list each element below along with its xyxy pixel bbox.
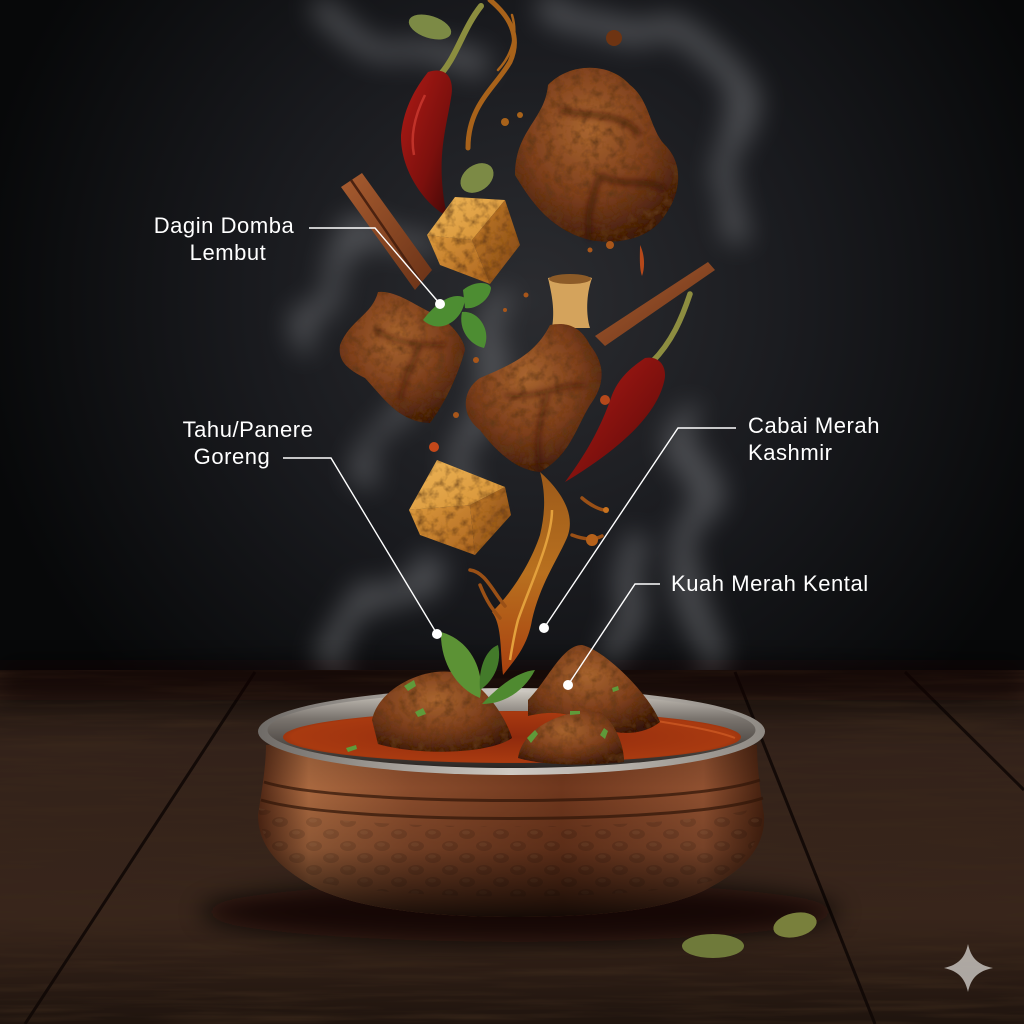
left lamb piece [340, 292, 465, 423]
cinnamon stick right [595, 262, 715, 346]
label: Cabai Merah Kashmir: Kashmir [748, 440, 833, 465]
right chili [565, 294, 690, 482]
bowl meat pieces [346, 645, 660, 765]
top sauce drizzle [468, 0, 622, 148]
label: Tahu/Panere Goreng: Goreng [194, 444, 270, 469]
label: Dagin Domba Lembut: Lembut [190, 240, 266, 265]
cardamom pods [406, 10, 819, 958]
bowl shadow [200, 882, 840, 942]
label: Tahu/Panere Goreng: Tahu/Panere [183, 417, 313, 442]
mint in bowl [441, 632, 535, 704]
mint sprig top [423, 283, 491, 348]
steam [306, 5, 740, 680]
lamb shank with bone [466, 274, 602, 472]
dark background [0, 0, 1024, 680]
paneer cube top [427, 197, 520, 284]
wooden table [0, 660, 1024, 1024]
label: Kuah Merah Kental: Kuah Merah Kental [671, 571, 869, 596]
annotation dots [432, 299, 573, 690]
curry sauce [283, 711, 741, 763]
top lamb piece [515, 68, 678, 276]
label: Cabai Merah Kashmir: Cabai Merah [748, 413, 880, 438]
label: Dagin Domba Lembut: Dagin Domba [154, 213, 294, 238]
copper bowl [258, 688, 765, 917]
sauce pour column [470, 472, 609, 675]
sauce droplets [429, 241, 614, 452]
cinnamon stick left [341, 173, 432, 290]
icon: sparkle watermark [944, 944, 993, 992]
silver rim [258, 688, 765, 775]
top chili [401, 6, 481, 216]
paneer cube lower [409, 460, 511, 555]
annotation leader lines [283, 228, 736, 685]
